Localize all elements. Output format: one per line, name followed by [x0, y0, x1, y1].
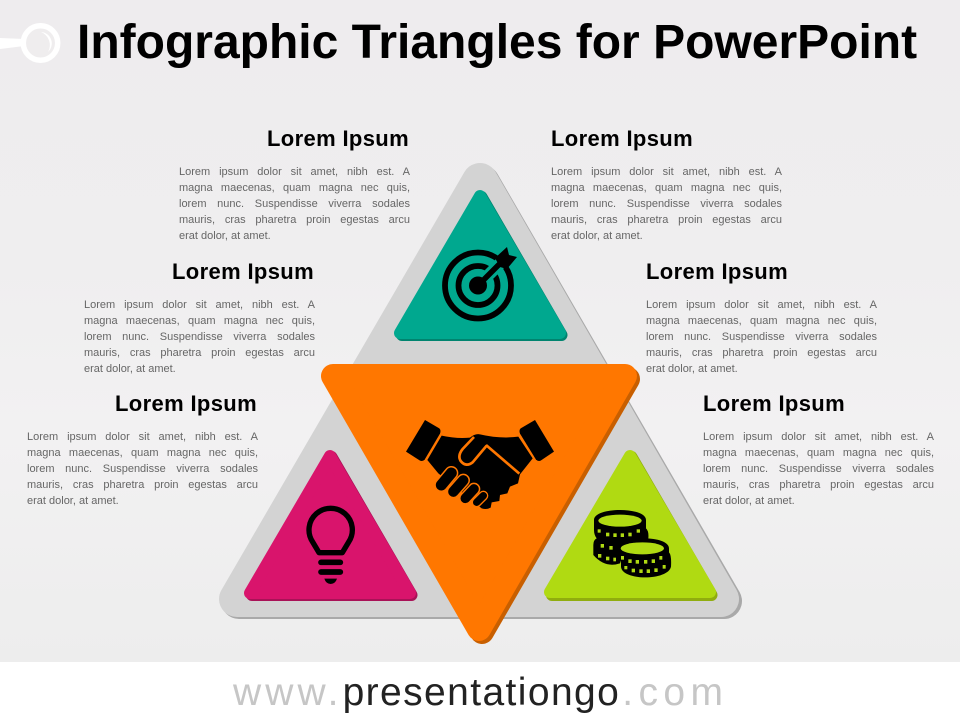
- panel: lime triangle with coins: [550, 456, 712, 595]
- text block: middle left: [84, 259, 315, 375]
- text block: top left: magna maecenas, quam magna nec quis,: [179, 182, 410, 194]
- title: Infographic Triangles for PowerPoint: [77, 16, 917, 69]
- text block: bottom right: magna maecenas, quam magna nec quis,: [703, 447, 934, 459]
- text block: bottom left: [27, 391, 258, 507]
- text block: bottom right: Lorem Ipsum: [703, 391, 845, 416]
- text block: middle right: magna maecenas, quam magna nec quis,: [646, 315, 877, 327]
- text block: top left: lorem nunc. Suspendisse viverra sodales: [179, 198, 410, 210]
- text block: top left: erat dolor, at amet.: [179, 230, 271, 242]
- text block: bottom right: Lorem ipsum dolor sit amet, nibh est. A: [703, 431, 934, 443]
- text block: middle right: Lorem Ipsum: [646, 259, 788, 284]
- text block: middle right: [646, 259, 877, 375]
- text block: middle left: magna maecenas, quam magna nec quis,: [84, 315, 315, 327]
- icon: handshake: [406, 420, 554, 509]
- text block: top left: [179, 126, 410, 242]
- text block: bottom right: lorem nunc. Suspendisse viverra sodales: [703, 463, 934, 475]
- text block: top right: [551, 126, 782, 242]
- text block: top right: lorem nunc. Suspendisse viverra sodales: [551, 198, 782, 210]
- panel: magenta triangle with bulb: [250, 456, 412, 595]
- text block: bottom right: [703, 391, 934, 507]
- text block: middle left: erat dolor, at amet.: [84, 363, 176, 375]
- text block: bottom left: Lorem ipsum dolor sit amet, nibh est. A: [27, 431, 258, 443]
- panel: orange center triangle with handshake: [333, 376, 628, 632]
- text block: bottom left: Lorem Ipsum: [115, 391, 257, 416]
- icon: target: [445, 247, 517, 318]
- text block: middle left: Lorem Ipsum: [172, 259, 314, 284]
- icon: coins: [593, 510, 671, 577]
- text block: middle right: Lorem ipsum dolor sit amet, nibh est. A: [646, 299, 877, 311]
- text block: top left: Lorem Ipsum: [267, 126, 409, 151]
- text block: middle right: erat dolor, at amet.: [646, 363, 738, 375]
- text block: bottom right: erat dolor, at amet.: [703, 495, 795, 507]
- icon: title pin ring: [0, 26, 58, 60]
- panel: teal triangle with target: [400, 196, 562, 335]
- text block: top right: Lorem ipsum dolor sit amet, nibh est. A: [551, 166, 782, 178]
- text block: top left: mauris, cras pharetra proin egestas arcu: [179, 214, 410, 226]
- text block: top left: Lorem ipsum dolor sit amet, nibh est. A: [179, 166, 410, 178]
- text block: middle left: mauris, cras pharetra proin egestas arcu: [84, 347, 315, 359]
- text block: middle left: Lorem ipsum dolor sit amet, nibh est. A: [84, 299, 315, 311]
- text block: bottom left: lorem nunc. Suspendisse viverra sodales: [27, 463, 258, 475]
- text block: bottom left: erat dolor, at amet.: [27, 495, 119, 507]
- text block: middle right: mauris, cras pharetra proin egestas arcu: [646, 347, 877, 359]
- text block: top right: Lorem Ipsum: [551, 126, 693, 151]
- text block: top right: erat dolor, at amet.: [551, 230, 643, 242]
- footer url: www.presentationgo.com: [233, 671, 728, 714]
- text block: bottom right: mauris, cras pharetra proin egestas arcu: [703, 479, 934, 491]
- text block: middle right: lorem nunc. Suspendisse viverra sodales: [646, 331, 877, 343]
- text block: top right: mauris, cras pharetra proin egestas arcu: [551, 214, 782, 226]
- text block: middle left: lorem nunc. Suspendisse viverra sodales: [84, 331, 315, 343]
- panel: grey outer triangle: [237, 181, 724, 601]
- text block: top right: magna maecenas, quam magna nec quis,: [551, 182, 782, 194]
- text block: bottom left: mauris, cras pharetra proin egestas arcu: [27, 479, 258, 491]
- text block: bottom left: magna maecenas, quam magna nec quis,: [27, 447, 258, 459]
- icon: light bulb: [309, 508, 352, 584]
